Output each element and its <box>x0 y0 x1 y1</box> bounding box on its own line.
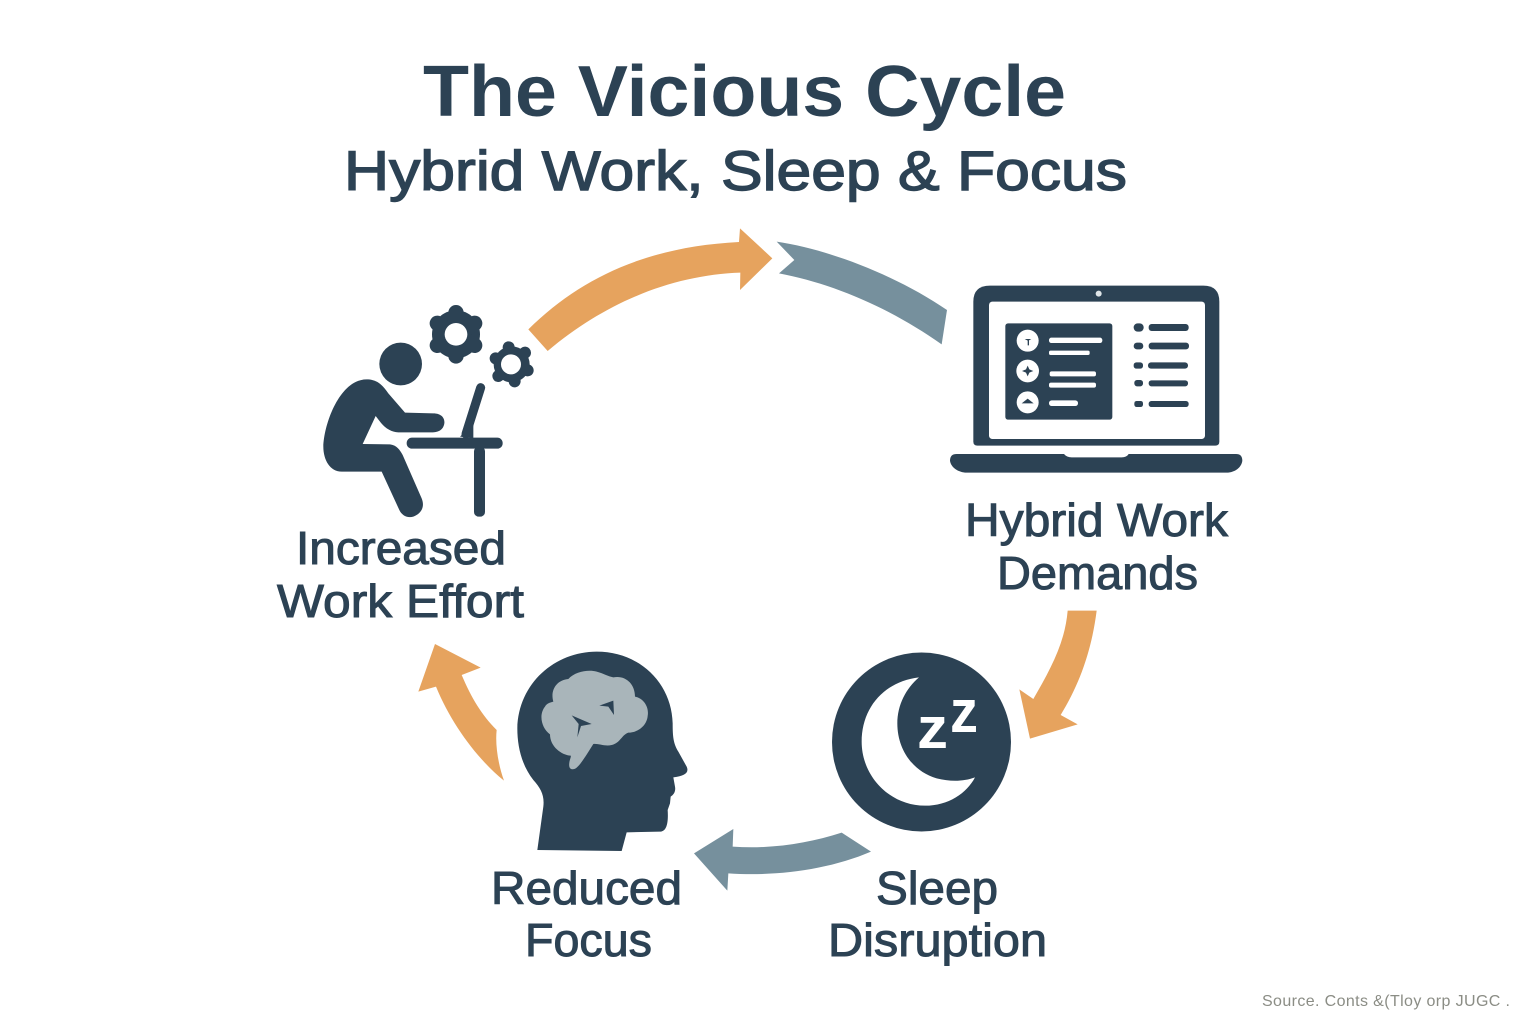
subtitle: Hybrid Work, Sleep & Focus <box>344 139 1127 202</box>
label: increased work effort: Increased <box>296 522 506 574</box>
label: reduced focus <box>491 862 682 966</box>
label: sleep disruption: Disruption <box>828 914 1047 966</box>
label: sleep disruption <box>828 862 1047 966</box>
label: increased work effort: Work Effort <box>277 575 524 627</box>
icon: head with foggy brain <box>517 652 687 851</box>
label: reduced focus: Reduced <box>491 862 682 914</box>
arrow: effort to work demands, orange <box>528 228 772 351</box>
icon: moon and zz: z <box>950 678 978 745</box>
label: sleep disruption: Sleep <box>876 862 998 914</box>
arrow: focus to effort, orange <box>418 644 504 781</box>
icon: moon and zz: z <box>917 696 948 761</box>
icon: laptop with dashboard <box>950 286 1242 473</box>
arrow: sleep to focus, slate <box>694 829 871 891</box>
title: The Vicious Cycle <box>423 52 1066 132</box>
icon: moon and zz <box>832 652 1011 832</box>
label: increased work effort <box>277 522 524 627</box>
arrow: demands to sleep, orange <box>1019 611 1097 739</box>
label: reduced focus: Focus <box>525 914 652 966</box>
icon: person working at desk with gears <box>323 310 530 517</box>
arrow: top right, slate <box>777 242 947 344</box>
label: hybrid work demands: Demands <box>997 547 1198 599</box>
label: hybrid work demands: Hybrid Work <box>965 494 1229 546</box>
label: hybrid work demands <box>965 494 1229 599</box>
source note: Source. Conts &(Tloy orp JUGC . <box>1262 993 1510 1010</box>
